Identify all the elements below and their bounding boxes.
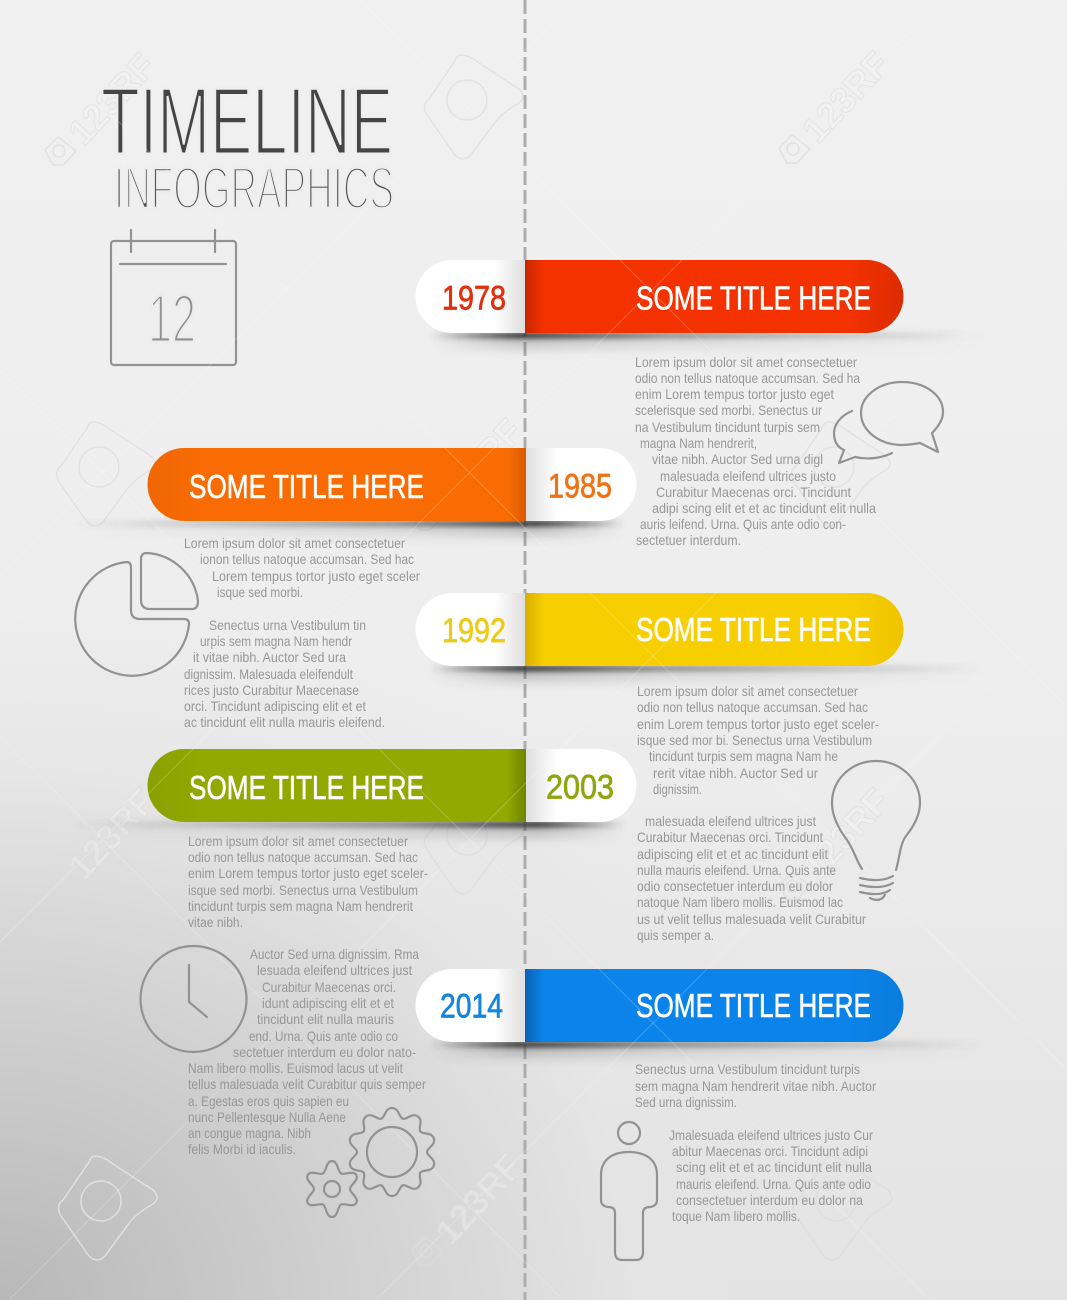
milestone 2014: SOME TITLE HERE (636, 987, 871, 1024)
text block 2003: tincidunt turpis sem magna Nam hendrerit (188, 898, 413, 914)
text block 1978: scelerisque sed morbi. Senectus ur (635, 402, 822, 418)
text block 1985: orci. Tincidunt adipiscing elit et et (184, 698, 366, 714)
milestone 2003: SOME TITLE HERE (189, 769, 424, 806)
text block 1992: isque sed mor bi. Senectus urna Vestibulum (637, 732, 872, 748)
watermarks: 123RF (794, 781, 898, 887)
icon: clock (140, 946, 246, 1052)
title (101, 68, 394, 222)
text block 2003: nunc Pellentesque Nulla Aene (188, 1109, 346, 1125)
text block 2014: toque Nam libero mollis. (672, 1208, 800, 1224)
text block 2003: vitae nibh. (188, 914, 243, 930)
milestone 1978 (416, 260, 985, 347)
text block 1978: Lorem ipsum dolor sit amet consectetuer (635, 354, 857, 370)
text block 1978 (635, 354, 876, 548)
text block 2003: idunt adipiscing elit et et (262, 995, 394, 1011)
milestone 1978: 1978 (442, 280, 506, 318)
text block 2003: tellus malesuada velit Curabitur quis semper (188, 1076, 426, 1092)
text block 1978: odio non tellus natoque accumsan. Sed ha (635, 370, 860, 386)
text block 2003: Auctor Sed urna dignissim. Rma (250, 946, 419, 962)
watermarks: 123RF (794, 44, 898, 150)
text block 1978: Curabitur Maecenas orci. Tincidunt (656, 484, 851, 500)
text block 1992: nulla mauris eleifend. Urna. Quis ante (637, 862, 836, 878)
milestone 1978: SOME TITLE HERE (636, 280, 871, 316)
text block 1992: quis semper a. (637, 927, 714, 943)
milestone 2003 (70, 749, 636, 836)
text block 1985: rices justo Curabitur Maecenase (184, 682, 359, 698)
text block 1992: dignissim. (653, 781, 702, 797)
text block 1978: auris leifend. Urna. Quis ante odio con- (640, 516, 846, 532)
milestone 1985: SOME TITLE HERE (189, 468, 424, 505)
text block 2014: consectetuer interdum eu dolor na (676, 1192, 863, 1208)
text block 1992: odio non tellus natoque accumsan. Sed hac (637, 699, 868, 715)
title: TIMELINE (101, 68, 393, 175)
icon: pie chart (75, 553, 198, 676)
icon: gears (303, 1108, 437, 1217)
text block 2014: mauris eleifend. Urna. Quis ante odio (676, 1176, 871, 1192)
text block 1992: odio consectetuer interdum eu dolor (637, 878, 833, 894)
milestone 2014: 2014 (440, 988, 503, 1026)
text block 1985: dignissim. Malesuada eleifendult (184, 666, 353, 682)
text block 1978: enim Lorem tempus tortor justo eget (635, 386, 834, 402)
text block 2003: odio non tellus natoque accumsan. Sed hac (188, 849, 418, 865)
text block 2003: a. Egestas eros quis sapien eu (188, 1093, 349, 1109)
text block 2003: Curabitur Maecenas orci. (262, 979, 396, 995)
milestone 1992: 1992 (442, 612, 506, 650)
text block 2003: sectetuer interdum eu dolor nato- (233, 1044, 416, 1060)
icon: speech bubbles (834, 382, 943, 463)
text block 1985: Lorem ipsum dolor sit amet consectetuer (184, 535, 405, 551)
text block 2003: Nam libero mollis. Euismod lacus ut velit (188, 1060, 403, 1076)
text block 1985: Lorem tempus tortor justo eget sceler (212, 568, 420, 584)
text block 2003: tincidunt elit nulla mauris (257, 1011, 394, 1027)
text block 2003: Lorem ipsum dolor sit amet consectetuer (188, 833, 408, 849)
text block 1978: na Vestibulum tincidunt turpis sem (635, 419, 820, 435)
text block 1992: Curabitur Maecenas orci. Tincidunt (637, 829, 823, 845)
text block 1985: isque sed morbi. (217, 584, 303, 600)
milestone 1992: SOME TITLE HERE (636, 611, 871, 648)
text block 2003 (188, 833, 428, 1157)
text block 2014: Sed urna dignissim. (635, 1094, 737, 1110)
text block 1985: ac tincidunt elit nulla mauris eleifend. (184, 714, 385, 730)
text block 1978: malesuada eleifend ultrices justo (660, 468, 836, 484)
milestone 2003: 2003 (546, 768, 614, 806)
milestone 1992 (415, 593, 985, 680)
text block 2014: sem magna Nam hendrerit vitae nibh. Auctor (635, 1078, 876, 1094)
text block 1992: rerit vitae nibh. Auctor Sed ur (653, 765, 818, 781)
text block 1985: urpis sem magna Nam hendr (200, 633, 352, 649)
text block 2003: end. Urna. Quis ante odio co (249, 1028, 398, 1044)
text block 1978: magna Nam hendrerit, (640, 435, 757, 451)
text block 1978: vitae nibh. Auctor Sed urna digl (652, 451, 823, 467)
text block 2003: enim Lorem tempus tortor justo eget sceler- (188, 865, 428, 881)
text block 1978: sectetuer interdum. (636, 532, 741, 548)
icon: calendar (111, 230, 236, 365)
icon: light bulb (832, 761, 920, 900)
text block 1992: Lorem ipsum dolor sit amet consectetuer (637, 683, 858, 699)
text block 1992: natoque Nam libero mollis. Euismod lac (637, 894, 843, 910)
text block 2014: abitur Maecenas orci. Tincidunt adipi (672, 1143, 868, 1159)
text block 2014: scing elit et et ac tincidunt elit nulla (676, 1159, 872, 1175)
watermarks: 123RF (60, 46, 164, 152)
text block 1985: Senectus urna Vestibulum tin (209, 617, 366, 633)
text block 2003: an congue magna. Nibh (188, 1125, 311, 1141)
text block 2003: felis Morbi id iaculis. (188, 1141, 296, 1157)
text block 1978: adipi scing elit et et ac tincidunt elit nulla (652, 500, 876, 516)
watermarks: 123RF (60, 781, 164, 887)
text block 1992: malesuada eleifend ultrices just (645, 813, 816, 829)
text block 2014: Senectus urna Vestibulum tincidunt turpis (635, 1061, 860, 1077)
text block 2014 (635, 1061, 876, 1224)
text block 1992: adipiscing elit et et ac tincidunt elit (637, 846, 828, 862)
timeline dashed line (524, 0, 526, 1300)
icon: person (601, 1122, 657, 1260)
title: INFOGRAPHICS (114, 156, 394, 222)
text block 1992: tincidunt turpis sem magna Nam he (649, 748, 838, 764)
text block 2003: isque sed morbi. Senectus urna Vestibulum (188, 882, 418, 898)
text block 1992: us ut velit tellus malesuada velit Curabitur (637, 911, 866, 927)
milestone 1985 (70, 448, 636, 535)
watermarks: 123RF (427, 1146, 531, 1252)
milestone 1985: 1985 (548, 468, 612, 506)
text block 1985: it vitae nibh. Auctor Sed ura (193, 649, 346, 665)
watermarks: 123RF (427, 411, 531, 517)
text block 1985 (184, 535, 420, 730)
text block 1985: ionon tellus natoque accumsan. Sed hac (200, 551, 414, 567)
icon: calendar: 12 (148, 281, 196, 357)
milestone 2014 (415, 969, 985, 1056)
text block 2014: Jmalesuada eleifend ultrices justo Cur (669, 1127, 873, 1143)
text block 1992 (637, 683, 879, 943)
text block 2003: lesuada eleifend ultrices just (257, 962, 412, 978)
watermarks (45, 44, 898, 1265)
text block 1992: enim Lorem tempus tortor justo eget sceler- (637, 716, 879, 732)
